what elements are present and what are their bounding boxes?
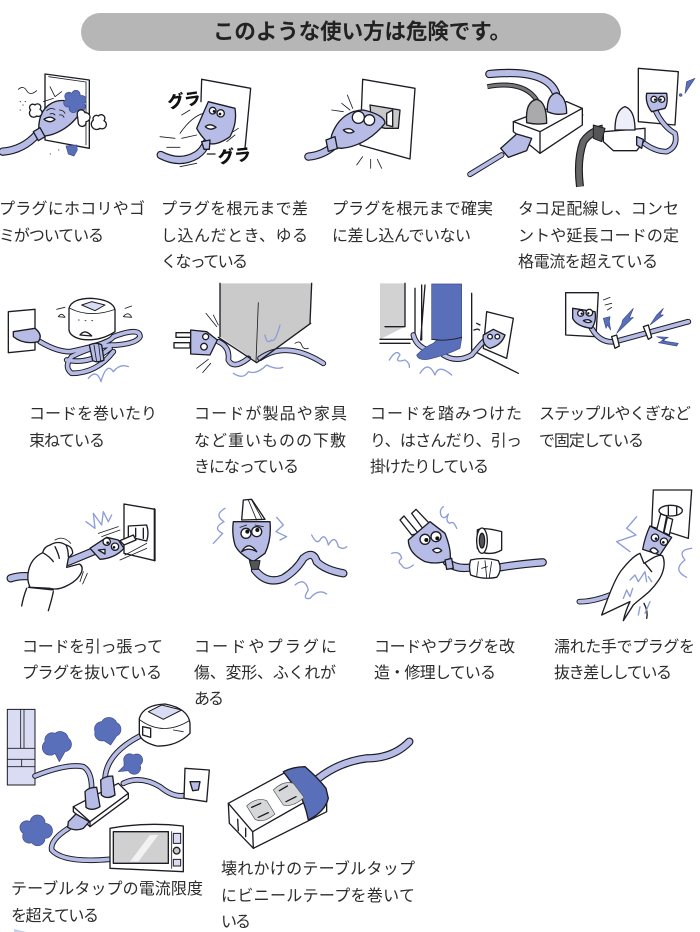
caption: taped table tap: いる <box>221 914 251 931</box>
caption: cord under heavy objects: きになっている <box>194 458 299 476</box>
caption: dust on plug: プラグにホコリやゴ <box>0 199 145 218</box>
caption: modified plug <box>374 638 515 682</box>
illustration: loose plug: グラ <box>217 144 252 167</box>
caption: bundled cord <box>29 405 157 450</box>
caption: bundled cord: コードを巻いたり <box>29 405 157 423</box>
caption: dust on plug <box>0 199 145 245</box>
illustration: plug not fully inserted <box>308 79 415 168</box>
caption: octopus wiring: 格電流を超えている <box>518 253 658 271</box>
caption: not fully inserted: に差し込んでいない <box>332 227 471 245</box>
caption: loose plug: くなっている <box>161 253 248 271</box>
caption: table tap limit: を超えている <box>11 907 99 925</box>
illustration: bundled cord <box>8 298 140 382</box>
caption: not fully inserted <box>332 200 493 245</box>
caption: cord under heavy objects <box>194 405 347 476</box>
caption: damaged plug: 傷、変形、ふくれが <box>194 664 336 682</box>
caption: cord under heavy objects: など重いものの下敷 <box>194 431 346 450</box>
caption: octopus wiring: ントや延長コードの定 <box>518 227 679 245</box>
illustration: loose plug: グラ <box>166 88 202 112</box>
title banner <box>81 13 621 51</box>
illustration: cord under furniture <box>174 283 323 376</box>
illustration: wet hand <box>579 490 692 621</box>
illustration: repaired plug <box>392 507 543 578</box>
illustration: pulling the cord <box>11 504 155 611</box>
caption: dust on plug: ミがついている <box>0 227 104 245</box>
illustration: dusty plug <box>3 74 106 156</box>
caption: pulling cord: コードを引っ張って <box>22 638 163 656</box>
caption: bundled cord: 束ねている <box>29 432 105 450</box>
illustration: stepping on cord <box>380 283 518 375</box>
caption: loose plug: し込んだとき、ゆる <box>161 227 308 245</box>
caption: stapled cord: ステップルやくぎなど <box>539 405 691 423</box>
decorative corner mark <box>14 929 26 932</box>
illustration: overloaded table tap <box>7 704 209 872</box>
caption: not fully inserted: プラグを根元まで確実 <box>332 200 493 218</box>
illustration: stapled cord <box>566 293 688 348</box>
caption: wet hands: 抜き差ししている <box>554 664 672 682</box>
caption: wet hands <box>554 638 695 682</box>
caption: cord under heavy objects: コードが製品や家具 <box>194 405 347 423</box>
caption: taped table tap: にビニールテープを巻いて <box>221 887 415 905</box>
caption: octopus wiring: タコ足配線し、コンセ <box>518 200 679 218</box>
caption: stepping on cord: 掛けたりしている <box>370 458 489 476</box>
caption: table tap limit <box>11 879 203 925</box>
caption: taped table tap <box>221 859 415 931</box>
illustration: taped table tap <box>228 742 409 848</box>
caption: modified plug: コードやプラグを改 <box>374 638 515 656</box>
caption: wet hands: 濡れた手でプラグを <box>554 638 695 656</box>
caption: loose plug: プラグを根元まで差 <box>161 200 308 218</box>
caption: loose plug <box>161 200 308 271</box>
caption: stepping on cord: コードを踏みつけた <box>370 405 522 423</box>
caption: stapled cord <box>539 405 691 450</box>
caption: octopus wiring <box>518 200 679 271</box>
illustration: damaged plug <box>213 499 347 599</box>
illustration: octopus wiring <box>470 68 695 187</box>
title banner: このような使い方は危険です。 <box>213 20 511 44</box>
caption: pulling cord <box>22 638 163 682</box>
caption: stepping on cord: り、はさんだり、引っ <box>370 432 522 450</box>
caption: table tap limit: テーブルタップの電流限度 <box>11 879 203 898</box>
illustration: loose plug <box>160 79 252 167</box>
caption: stapled cord: で固定している <box>539 432 644 450</box>
caption: modified plug: 造・修理している <box>374 664 496 682</box>
caption: taped table tap: 壊れかけのテーブルタップ <box>221 859 415 878</box>
caption: damaged plug <box>194 638 337 708</box>
caption: damaged plug: ある <box>194 690 224 708</box>
caption: damaged plug: コードやプラグに <box>194 638 337 656</box>
caption: pulling cord: プラグを抜いている <box>22 664 162 682</box>
caption: stepping on cord <box>370 405 522 476</box>
